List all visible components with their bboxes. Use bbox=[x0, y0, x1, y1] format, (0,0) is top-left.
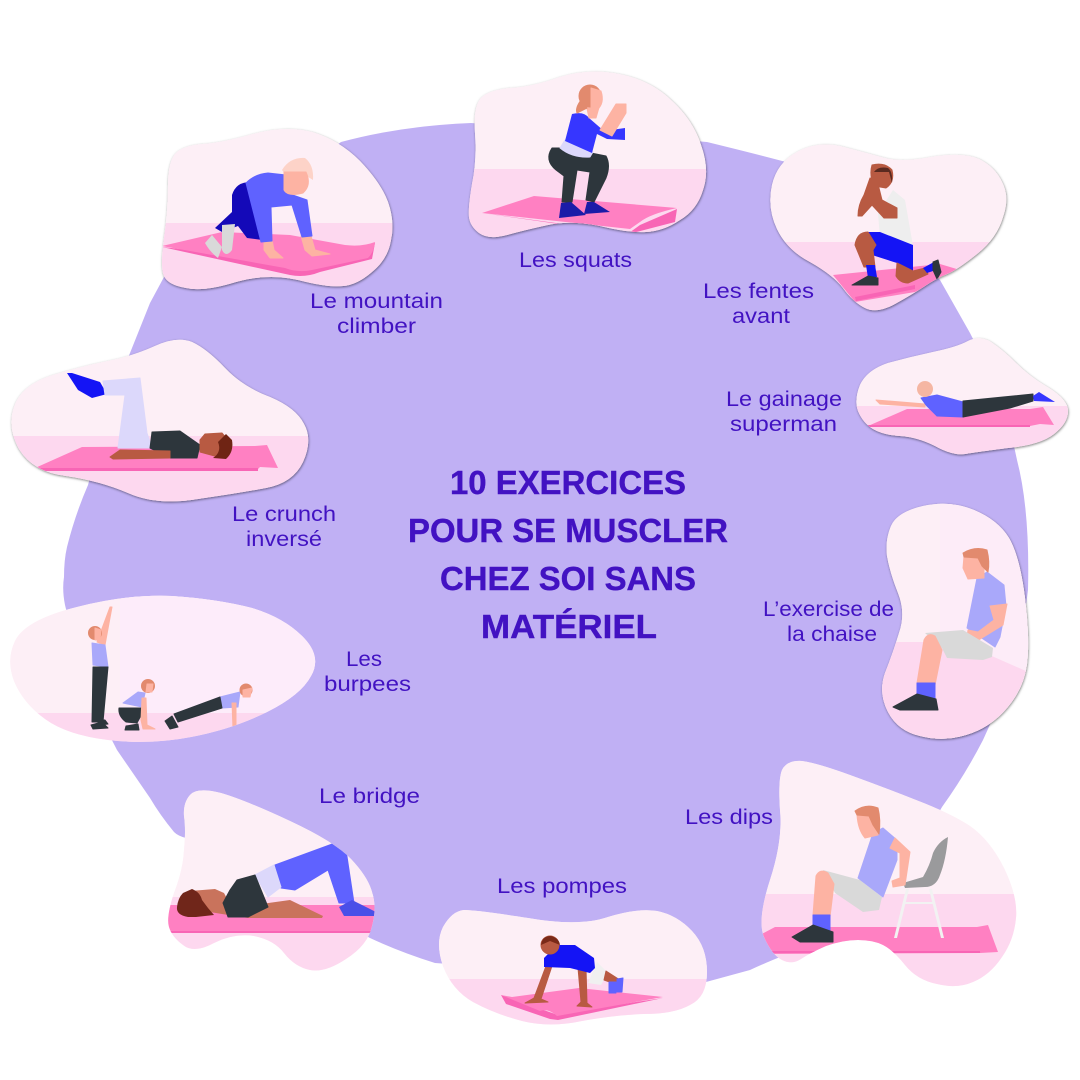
illustration: mountain climber bbox=[162, 144, 392, 290]
label: crunch inversé bbox=[232, 502, 336, 551]
illustration: crunch inversé bbox=[14, 340, 308, 502]
panel: exercice de la chaise bbox=[881, 503, 1030, 742]
panel: mountain climber bbox=[160, 128, 395, 292]
label: burpees: burpees bbox=[324, 672, 411, 696]
panel: dips bbox=[762, 760, 1016, 986]
label: gainage superman bbox=[726, 387, 842, 436]
panel: fentes avant bbox=[769, 144, 1008, 313]
label: dips: Les dips bbox=[685, 805, 773, 829]
panel: gainage superman bbox=[855, 338, 1070, 457]
label: mountain climber: Le mountain bbox=[310, 289, 443, 313]
label: fentes avant: avant bbox=[732, 304, 790, 328]
panel: bridge bbox=[168, 790, 374, 970]
label: exercice de la chaise bbox=[763, 597, 894, 646]
label: gainage superman: superman bbox=[730, 412, 837, 436]
label: pompes: Les pompes bbox=[497, 874, 627, 898]
title: 10 EXERCICES bbox=[450, 464, 686, 501]
label: burpees bbox=[324, 647, 411, 696]
label: mountain climber bbox=[310, 289, 443, 338]
title: CHEZ SOI SANS bbox=[440, 560, 696, 597]
panel: burpees bbox=[10, 596, 316, 742]
illustration: pompes bbox=[439, 910, 707, 1024]
label: burpees: Les bbox=[346, 647, 382, 671]
label: bridge: Le bridge bbox=[319, 784, 420, 808]
illustration: burpees bbox=[38, 596, 316, 742]
panel: pompes bbox=[439, 910, 707, 1024]
illustration: squats bbox=[468, 84, 706, 238]
label: crunch inversé: inversé bbox=[246, 527, 322, 551]
label: exercice de la chaise: L’exercise de bbox=[763, 597, 894, 621]
label: gainage superman: Le gainage bbox=[726, 387, 842, 411]
label: fentes avant: Les fentes bbox=[703, 279, 814, 303]
label: exercice de la chaise: la chaise bbox=[787, 622, 877, 646]
illustration: bridge bbox=[168, 790, 374, 970]
label: squats: Les squats bbox=[519, 248, 632, 272]
label: mountain climber: climber bbox=[337, 314, 416, 338]
illustration: fentes avant bbox=[770, 162, 1006, 310]
label: fentes avant bbox=[703, 279, 814, 328]
illustration: dips bbox=[762, 760, 1016, 986]
illustration: chaise bbox=[882, 504, 1028, 739]
title: MATÉRIEL bbox=[481, 608, 657, 645]
purple background blob bbox=[63, 123, 1028, 982]
illustration: gainage superman bbox=[856, 339, 1068, 454]
panel: squats bbox=[468, 70, 708, 240]
title: POUR SE MUSCLER bbox=[408, 512, 728, 549]
panel: crunch inversé bbox=[10, 339, 310, 504]
label: crunch inversé: Le crunch bbox=[232, 502, 336, 526]
title bbox=[408, 464, 728, 645]
